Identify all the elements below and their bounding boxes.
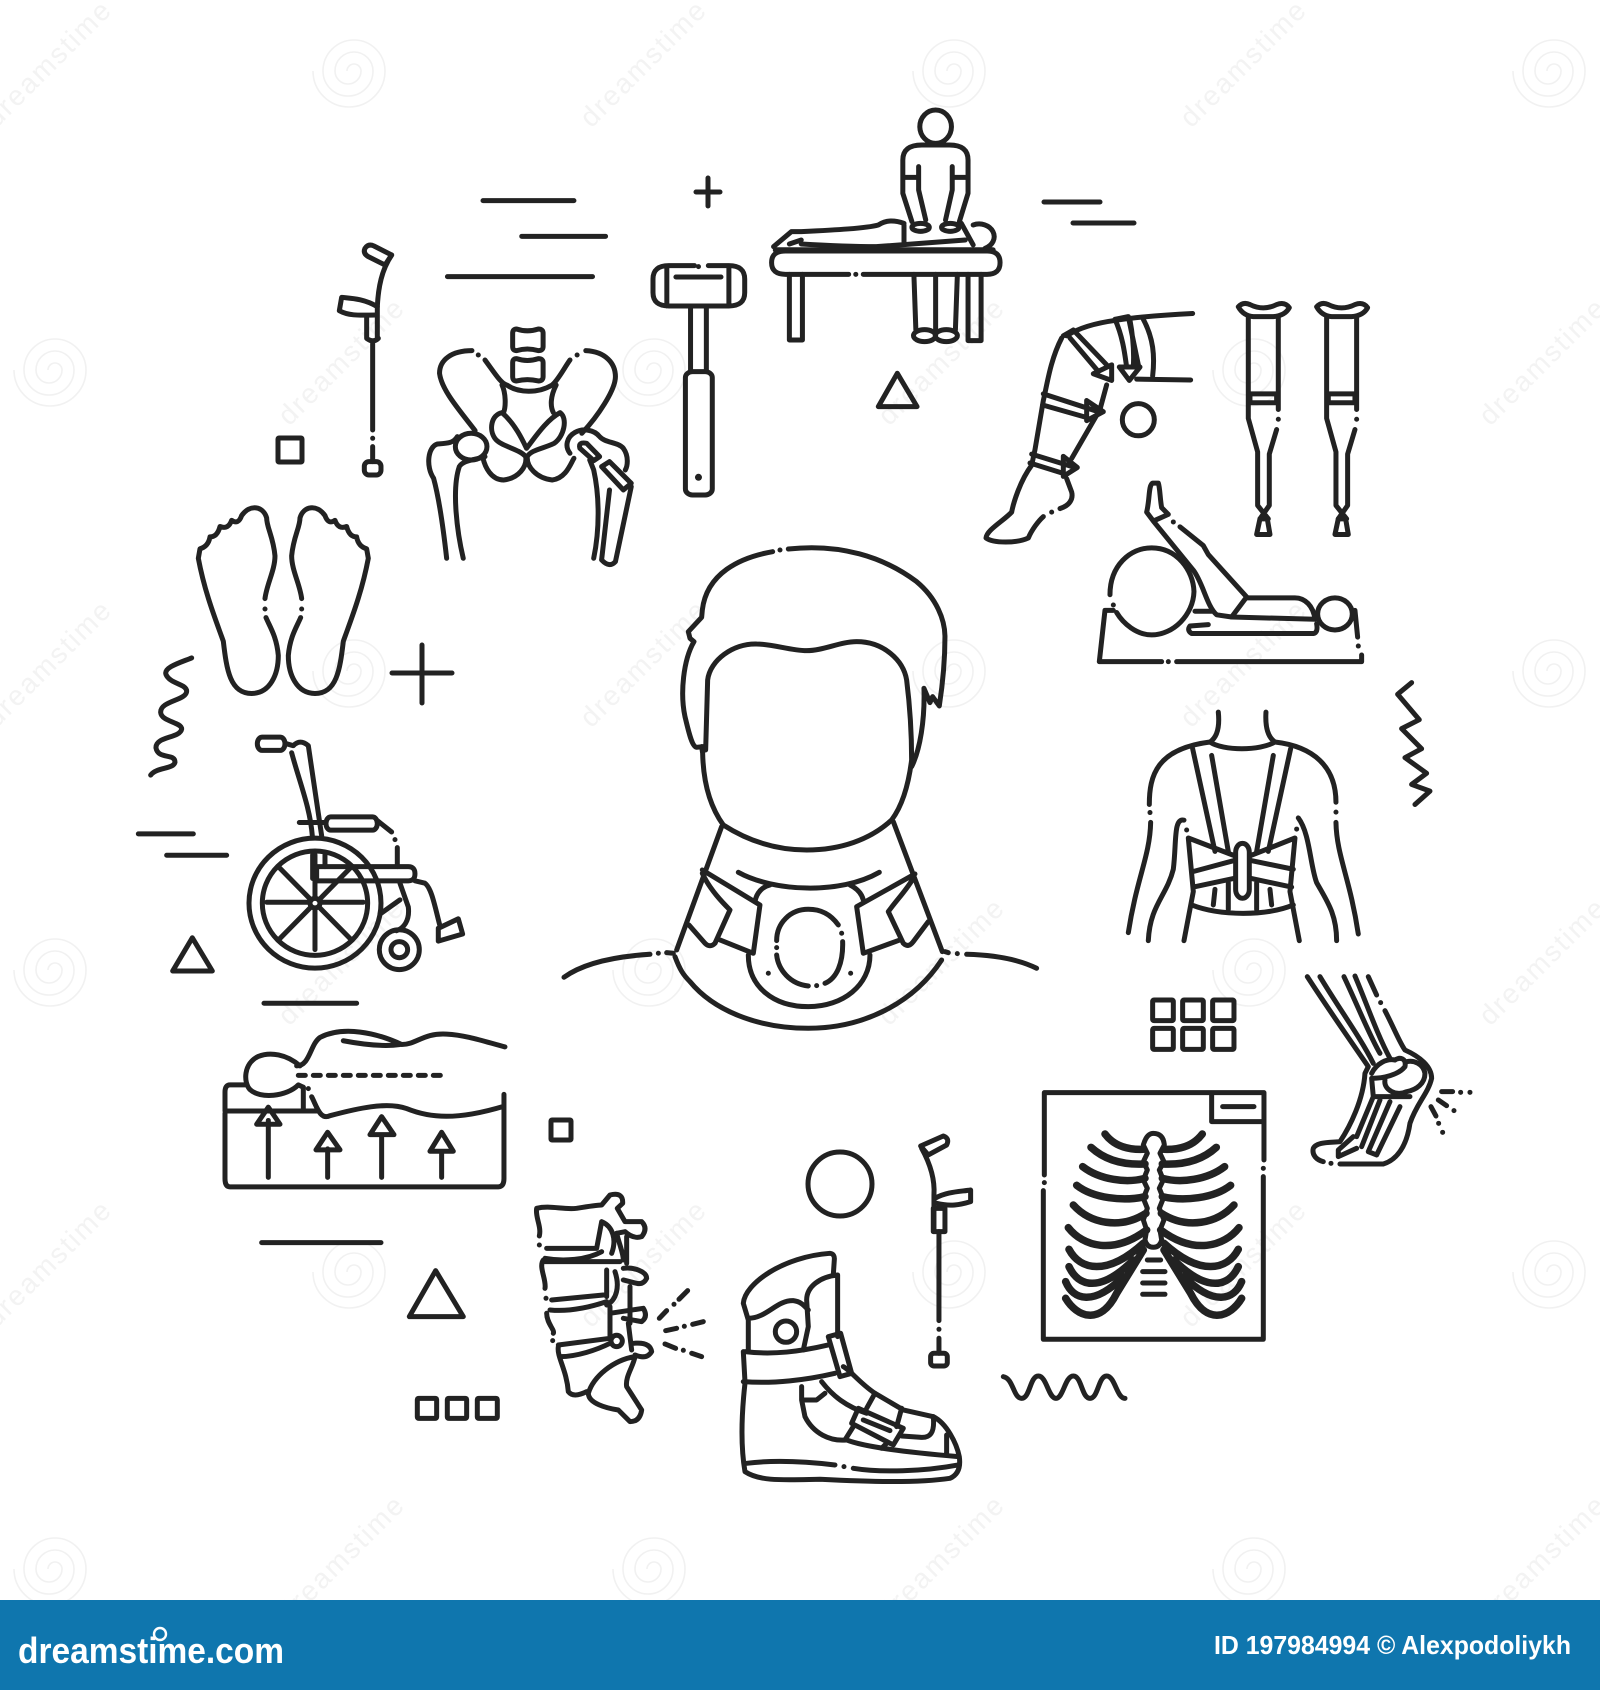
icon: massage table with therapist bbox=[772, 110, 1000, 342]
text: dreamstime bbox=[872, 892, 1011, 1031]
text: dreamstime bbox=[1174, 1194, 1313, 1333]
icon: lumbar spine bbox=[536, 1194, 652, 1422]
shoulders bbox=[564, 952, 1037, 977]
text: dreamstime bbox=[872, 292, 1011, 431]
left dashes bbox=[138, 834, 357, 1003]
icon: leg exercise on ball bbox=[1099, 483, 1362, 662]
icon: wheelchair bbox=[249, 737, 463, 970]
logo spiral bbox=[154, 1628, 166, 1640]
icon: forearm crutch bottom bbox=[921, 1136, 971, 1366]
plus large bbox=[392, 645, 452, 703]
table bbox=[772, 251, 1000, 274]
icon: chest x-ray bbox=[1043, 1093, 1264, 1339]
therapist bbox=[920, 110, 951, 143]
icon: foot skeleton bbox=[1307, 976, 1470, 1164]
text: dreamstime bbox=[1174, 594, 1313, 733]
icon: pelvis with hip implant bbox=[429, 329, 631, 565]
central figure: head with cervical collar bbox=[564, 548, 1037, 1028]
patient bbox=[774, 221, 994, 248]
top right lines bbox=[1044, 202, 1134, 223]
face bbox=[702, 642, 912, 850]
crutch right bbox=[1317, 303, 1368, 534]
icon: reflex hammer bbox=[653, 266, 745, 495]
three squares bbox=[417, 1398, 497, 1418]
icon: knee orthosis bbox=[986, 313, 1193, 542]
collar body bbox=[675, 822, 942, 1028]
wave bottom right bbox=[1003, 1376, 1125, 1398]
squiggle left bbox=[151, 658, 192, 775]
square bottom left bbox=[551, 1120, 571, 1140]
logo text: dreamstime.com bbox=[18, 1630, 284, 1671]
zigzag right bbox=[1398, 683, 1430, 805]
triangle left bbox=[173, 938, 212, 971]
collar straps bbox=[689, 870, 928, 953]
icon: forearm crutch bbox=[339, 245, 392, 475]
ribs left bbox=[1066, 1134, 1147, 1315]
ribs right bbox=[1161, 1134, 1242, 1315]
squares grid bbox=[1153, 1000, 1234, 1049]
circle bottom bbox=[808, 1152, 872, 1216]
icon: bare feet soles bbox=[198, 508, 368, 693]
text: dreamstime bbox=[272, 1489, 411, 1628]
image id and credit: ID 197984994 © Alexpodoliykh bbox=[1214, 1630, 1571, 1660]
square top left bbox=[278, 438, 302, 462]
plus small bbox=[696, 178, 720, 206]
text: dreamstime bbox=[272, 892, 411, 1031]
hair outline bbox=[683, 548, 945, 767]
text: dreamstime bbox=[272, 292, 411, 431]
icon: underarm crutches pair bbox=[1238, 303, 1368, 534]
text: dreamstime bbox=[574, 1194, 713, 1333]
top decoration lines bbox=[447, 201, 606, 277]
icon: back posture brace bbox=[1128, 712, 1358, 941]
crutch left bbox=[1238, 303, 1289, 534]
chin plate and ring bbox=[748, 885, 870, 1007]
triangle top bbox=[878, 373, 917, 407]
pain rays from spine bbox=[659, 1291, 703, 1357]
icon: orthopedic mattress with sleeper bbox=[225, 1031, 505, 1187]
line and triangle bottom left bbox=[262, 1243, 463, 1317]
icon: orthopedic walker boot bbox=[742, 1253, 960, 1482]
text: dreamstime bbox=[872, 1489, 1011, 1628]
text: dreamstime bbox=[574, 594, 713, 733]
footer bar bbox=[0, 1600, 1600, 1690]
